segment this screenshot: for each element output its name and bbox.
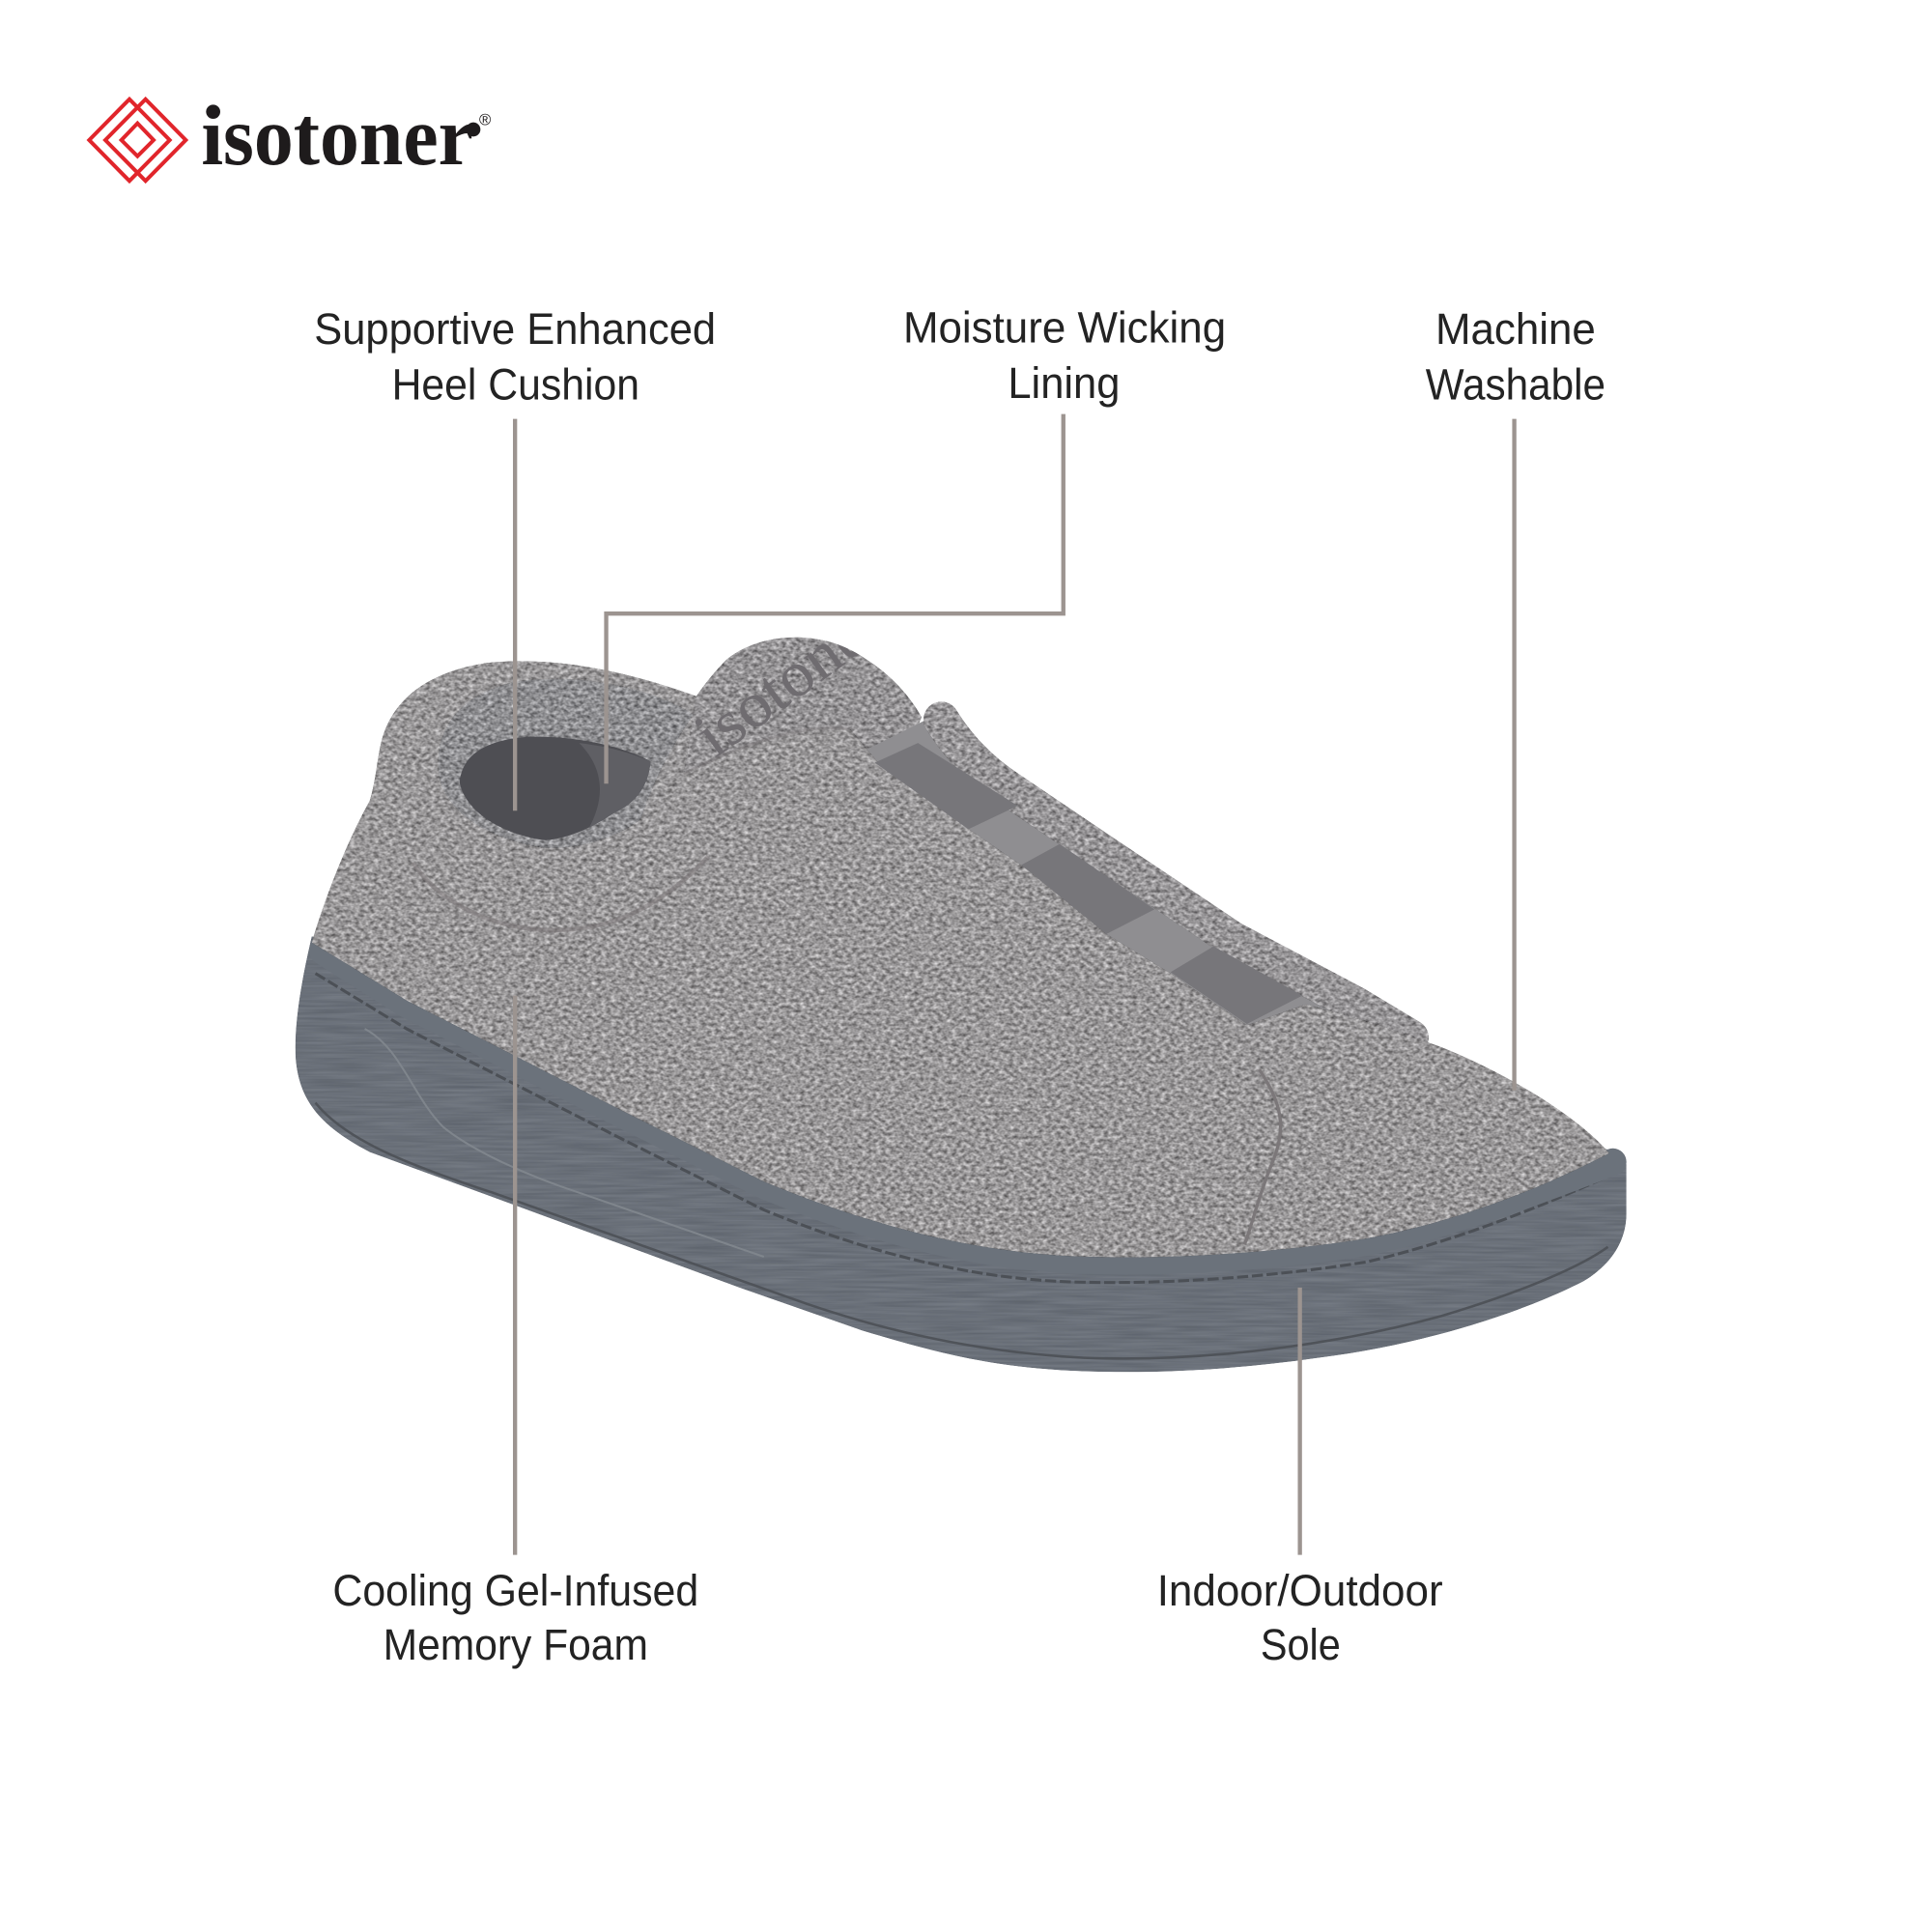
leader line <box>1513 419 1516 1091</box>
elbow leader line <box>607 414 1064 783</box>
label text: Supportive Enhanced <box>314 304 716 354</box>
leader line <box>513 996 517 1555</box>
callout: cooling gel-infused memory foam <box>332 996 698 1669</box>
wordmark: ısotoner <box>201 89 473 183</box>
label text: Moisture Wicking <box>903 303 1226 353</box>
throat lining <box>863 721 1331 1047</box>
welt <box>323 952 1613 1261</box>
leader line <box>513 419 517 810</box>
seams <box>412 728 1281 1244</box>
label text <box>332 1566 698 1669</box>
label text <box>1426 304 1605 409</box>
callout: supportive enhanced heel cushion <box>314 304 716 810</box>
outsole line <box>316 1103 1608 1358</box>
heel opening <box>460 737 650 840</box>
icon: red nested diamonds <box>89 99 185 181</box>
wordmark: ® <box>479 110 492 128</box>
label text: Memory Foam <box>384 1620 648 1669</box>
label text <box>903 303 1226 408</box>
label text: Heel Cushion <box>392 359 639 409</box>
callout: indoor/outdoor sole <box>1157 1288 1443 1669</box>
label text: Indoor/Outdoor <box>1157 1566 1443 1615</box>
label text <box>314 304 716 409</box>
elastic straps <box>875 743 1302 1024</box>
collar lining <box>439 679 694 848</box>
right collar strip <box>941 720 1410 1037</box>
label text: Machine <box>1435 304 1596 354</box>
callout: machine washable <box>1426 304 1605 1091</box>
logo: isotoner <box>89 89 492 183</box>
tongue embossed logo: isotoner <box>682 587 897 771</box>
slipper photo illustration <box>296 587 1627 1372</box>
label text: Washable <box>1426 359 1605 409</box>
label text: Lining <box>1008 358 1120 408</box>
stitch line <box>316 974 1622 1283</box>
sole <box>296 936 1627 1372</box>
tongue <box>684 638 922 774</box>
heel opening: insole lighter area <box>579 743 650 828</box>
leader line <box>1298 1288 1301 1555</box>
heel inset <box>365 1029 764 1257</box>
label text: Sole <box>1261 1620 1341 1669</box>
callout: moisture wicking lining <box>607 303 1226 783</box>
label text <box>1157 1566 1443 1669</box>
main upper <box>312 661 1609 1258</box>
label text: Cooling Gel-Infused <box>332 1566 698 1615</box>
